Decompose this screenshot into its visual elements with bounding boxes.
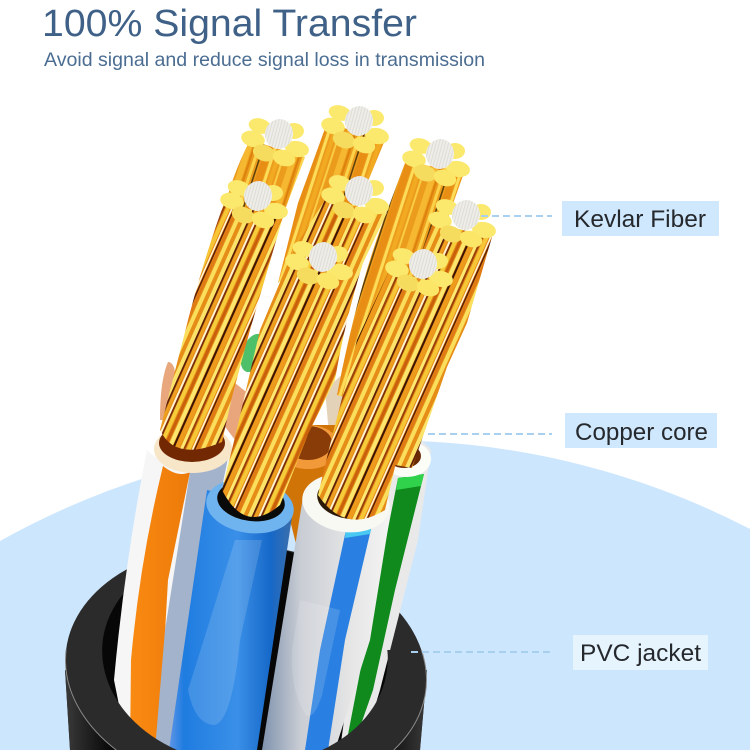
strand E [222,239,354,517]
strand G [395,197,497,468]
wire: green and white [340,434,431,750]
callout: PVC jacket: PVC jacket [580,640,701,667]
back strand F [337,136,471,410]
callout: PVC jacket [411,635,708,670]
PVC jacket front rim [65,650,427,750]
wire: orange and white [114,424,232,750]
background circle [0,440,750,750]
callout: Copper core: Copper core [575,419,708,446]
wire: blue [169,473,297,750]
callout: Kevlar Fiber: Kevlar Fiber [574,206,706,233]
strand D [268,173,390,450]
callout: Copper core [428,413,717,448]
back wires [160,330,345,560]
title: 100% Signal Transfer [42,3,417,45]
callout: Kevlar Fiber [481,201,719,236]
PVC jacket back [65,544,427,750]
back strand C [278,103,390,283]
subtitle: Avoid signal and reduce signal loss in transmission [44,49,485,71]
cable illustration [65,103,497,750]
strand B [160,178,289,450]
wire: white and blue [262,468,394,750]
strand H [318,246,454,520]
back strand A [205,116,310,280]
